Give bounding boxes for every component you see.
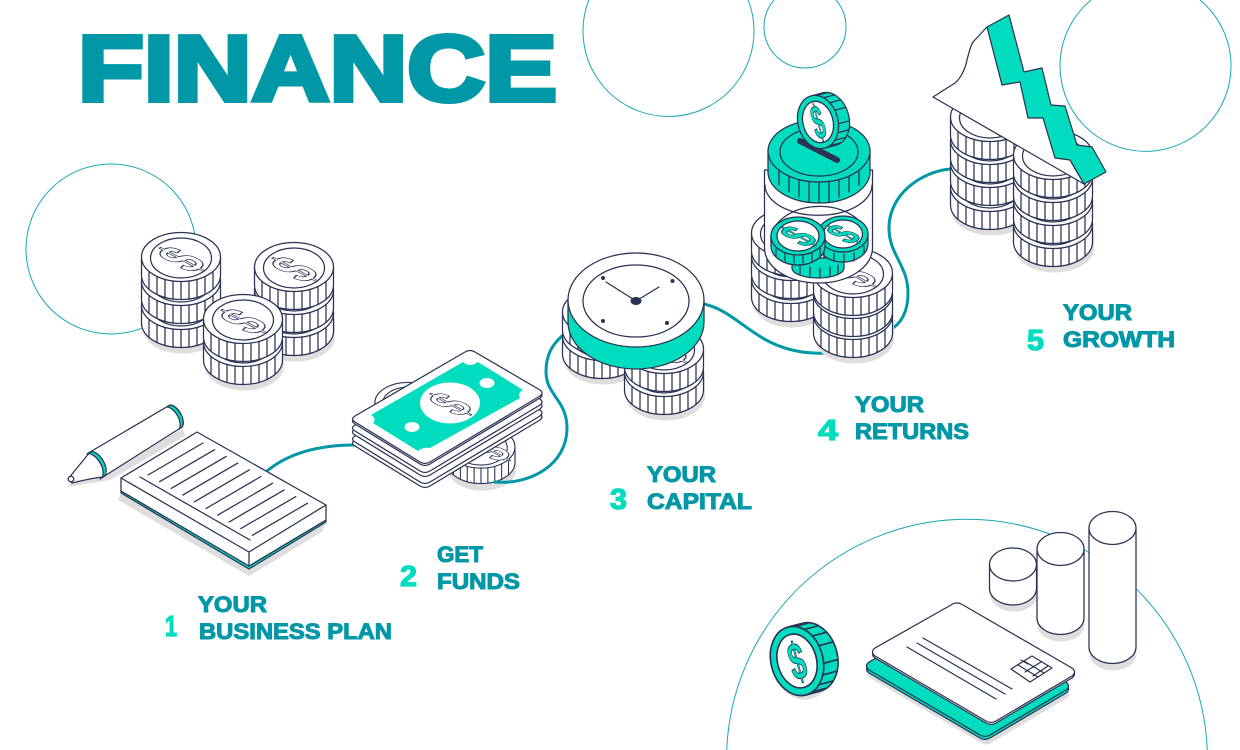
decorative circle: left — [26, 164, 196, 334]
icon: business plan notepad — [118, 432, 326, 576]
icon: dollar coin, bottom: $ — [782, 631, 812, 692]
coin stacks: top left: $ — [205, 300, 283, 342]
icon: dollar coin, bottom — [763, 617, 846, 706]
decorative circle: bottom — [727, 519, 1207, 750]
icon: stack of bills with coins: $ — [458, 433, 525, 469]
step 5 label: GROWTH — [1063, 327, 1175, 352]
icon: stack of bills with coins — [352, 350, 542, 491]
step 5 label: 5 — [1027, 325, 1044, 357]
decorative circle: top small — [764, 0, 846, 68]
icon: coin jar on coin stacks: $ — [815, 254, 893, 296]
connector: returns to growth — [889, 169, 950, 328]
step 4 label: RETURNS — [855, 419, 969, 444]
icon: clock on coin stacks — [562, 253, 705, 420]
step 1 label — [165, 592, 392, 644]
icon: coin jar on coin stacks: $ — [805, 94, 831, 150]
coin stacks: top left — [142, 232, 335, 390]
icon: coin jar on coin stacks: $ — [769, 220, 829, 254]
connector: plan to funds — [267, 445, 355, 471]
step 4 label — [818, 392, 969, 447]
icon: clock on coin stacks: $ — [626, 330, 704, 372]
step 1 label: BUSINESS PLAN — [199, 619, 392, 644]
step 3 label — [610, 462, 752, 516]
title: FINANCE — [78, 16, 557, 120]
step 1 label: YOUR — [198, 592, 267, 617]
step 4 label: 4 — [818, 415, 838, 447]
icon: stack of bills with coins: $ — [414, 385, 486, 423]
icon: coin jar on coin stacks — [752, 88, 894, 363]
step 1 label: 1 — [165, 611, 177, 643]
step 2 label: 2 — [400, 561, 417, 593]
coin stacks: top left: $ — [256, 248, 334, 290]
icon: coin jar on coin stacks: $ — [814, 218, 872, 250]
icon: growth chart on coin stacks — [933, 15, 1106, 272]
decorative circle: top large — [583, 0, 754, 116]
coin stacks: top left: $ — [143, 238, 221, 280]
step 2 label: GET — [437, 542, 484, 567]
icon: cylinder bar chart — [990, 512, 1136, 670]
step 2 label — [400, 542, 520, 594]
step 5 label — [1027, 300, 1175, 357]
step 2 label: FUNDS — [437, 569, 520, 594]
connector: funds to capital — [495, 336, 567, 482]
step 3 label: YOUR — [647, 462, 716, 487]
icon: credit card — [866, 603, 1074, 744]
step 3 label: CAPITAL — [647, 489, 752, 514]
icon: pencil — [67, 405, 185, 487]
connector: capital to returns — [704, 304, 830, 353]
step 5 label: YOUR — [1063, 300, 1132, 325]
step 4 label: YOUR — [855, 392, 924, 417]
decorative circle: top right — [1060, 0, 1231, 151]
step 3 label: 3 — [610, 484, 627, 516]
